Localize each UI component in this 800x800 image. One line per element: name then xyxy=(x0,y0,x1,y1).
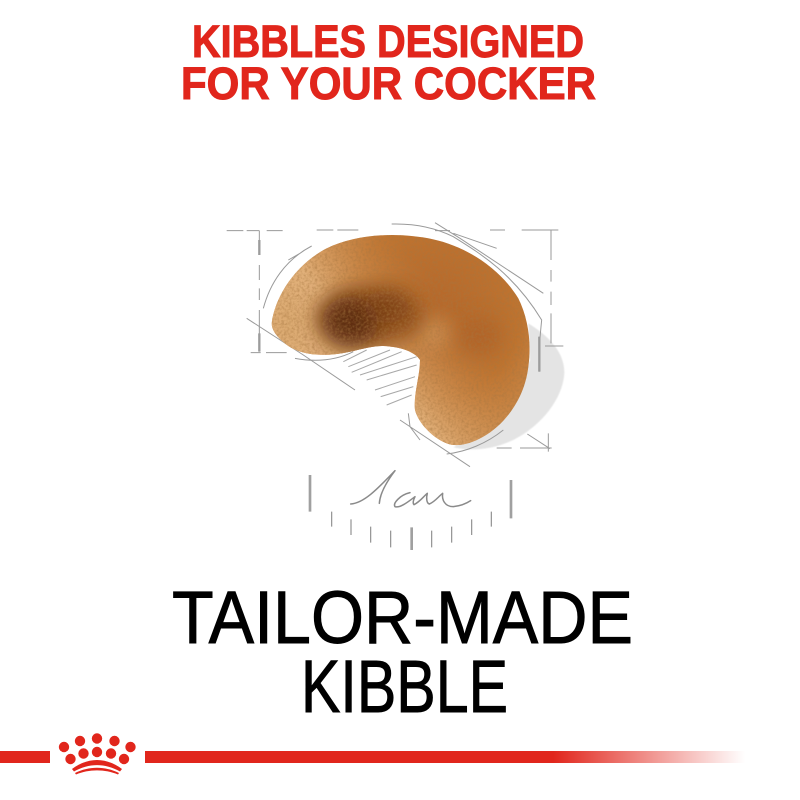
heading xyxy=(172,576,633,728)
ruler ticks xyxy=(310,475,511,550)
title: FOR YOUR COCKER xyxy=(181,58,596,109)
icon: royal crown logo xyxy=(59,733,136,774)
dimension sketch lines xyxy=(227,223,563,467)
1cm handwriting xyxy=(351,471,471,507)
hatching xyxy=(343,350,417,405)
title xyxy=(181,16,596,109)
heading: TAILOR-MADE xyxy=(172,576,633,659)
kibble shadow xyxy=(453,323,564,449)
kibble illustration xyxy=(227,223,564,550)
title: KIBBLES DESIGNED xyxy=(192,16,584,67)
footer band xyxy=(0,751,745,763)
kibble body xyxy=(272,235,530,446)
heading: KIBBLE xyxy=(301,645,508,728)
